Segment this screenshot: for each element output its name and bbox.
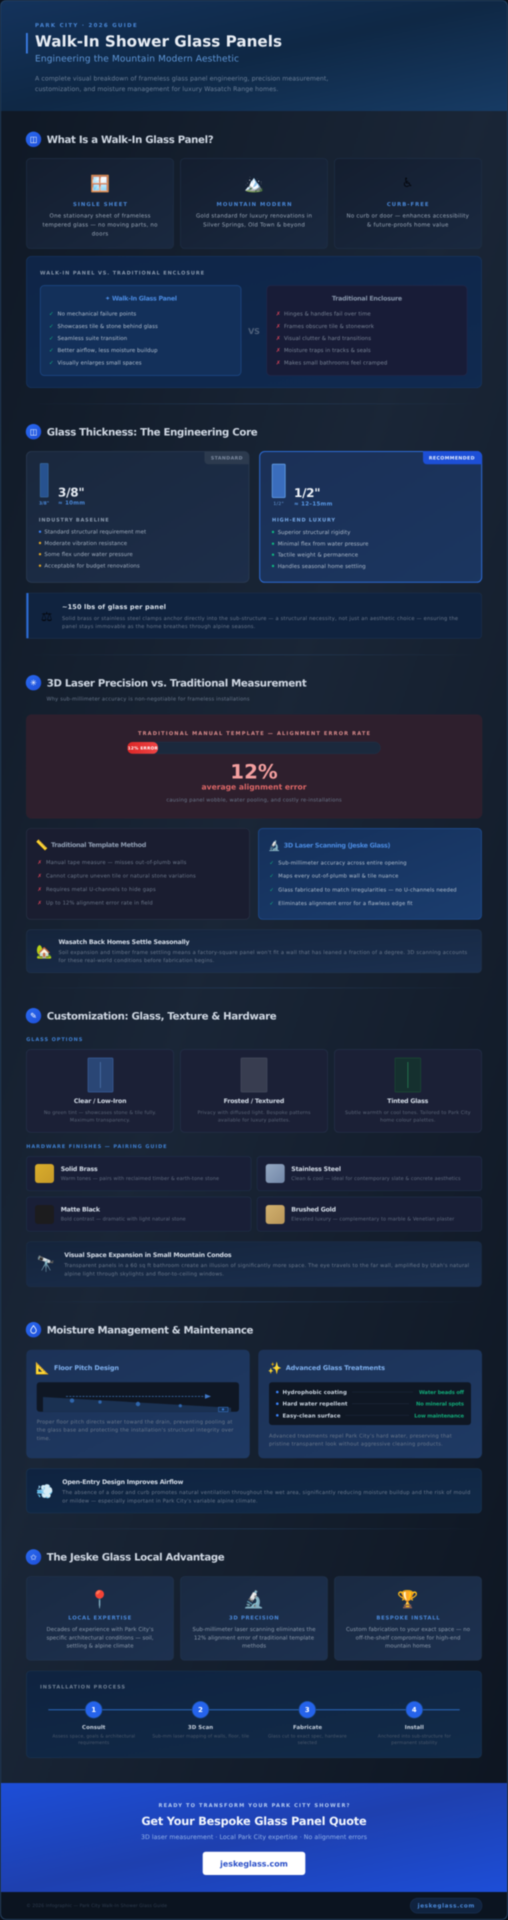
- icon: microscope: 🔬: [243, 1589, 265, 1610]
- table: treatments and benefits: Hydrophobic coating: [282, 1389, 347, 1396]
- section heading: local advantage: The Jeske Glass Local Advantage: [47, 1553, 225, 1564]
- section heading: customization: ✎: [30, 1012, 37, 1021]
- step 3: 3: [305, 1706, 310, 1714]
- hero header: Engineering the Mountain Modern Aesthetic: [35, 54, 239, 64]
- glass sample: [39, 464, 49, 507]
- step 1: Assess space, goals & architectural: [52, 1734, 135, 1740]
- card text: 3d precision: Sub-millimeter laser scanning eliminates the: [192, 1626, 316, 1633]
- panel: traditional template method: Cannot capture uneven tile or natural stone variations: [46, 873, 196, 879]
- finish: stainless steel: [266, 1164, 461, 1183]
- traditional column: ✗: [276, 335, 281, 342]
- panel: alignment error rate: causing panel wobble, water pooling, and costly re-installations: [166, 798, 342, 804]
- callout: visual space expansion: Transparent panels in a 60 sq ft bathroom create an illusion of significantly more space. The eye travels to the far wall, amplified by Utah's natural: [63, 1263, 469, 1269]
- panel: installation process: [26, 1671, 482, 1758]
- panel: 3d laser scanning: ✓: [270, 901, 274, 907]
- callout: seasonal settling: Soil expansion and timber frame settling means a factory-square panel won't fit a wall that has leaned a fraction of a degree. 3D scanning accounts: [58, 950, 468, 956]
- traditional column: ✗: [276, 310, 281, 318]
- card text: mountain modern: MOUNTAIN MODERN: [216, 202, 292, 208]
- card text: bespoke install: [346, 1616, 470, 1650]
- section heading: moisture management: [26, 1322, 254, 1337]
- finish: matte black: [35, 1205, 186, 1224]
- panel: floor pitch design: time.: [37, 1436, 51, 1442]
- list: baseline traits: Some flex under water pressure: [44, 551, 133, 558]
- walk-in column: Showcases tile & stone behind glass: [58, 323, 158, 330]
- walk-in column: ✓: [49, 360, 54, 366]
- panel: 1/2 inch recommended glass: 1/2": [294, 486, 320, 500]
- swatch: clear glass: [88, 1058, 113, 1092]
- hero header: A complete visual breakdown of frameless glass panel engineering, precision measurement,: [35, 76, 328, 82]
- card text: bespoke install: Custom fabrication to your exact space — no: [346, 1626, 470, 1633]
- card text: clear: No green tint — showcases stone & tile fully.: [44, 1110, 156, 1116]
- callout: visual space expansion: [26, 1242, 482, 1287]
- card text: local expertise: settling & alpine climate: [66, 1643, 134, 1650]
- card text: frosted: Privacy with diffused light. Bespoke patterns: [198, 1110, 311, 1116]
- step 2: 2: [198, 1706, 203, 1714]
- finish: solid brass: [35, 1164, 219, 1183]
- callout: seasonal settling: Wasatch Back Homes Settle Seasonally: [58, 939, 190, 946]
- card text: frosted: [198, 1098, 311, 1124]
- panel: 3d laser scanning: Sub-millimeter accuracy across entire opening: [278, 860, 407, 866]
- card text: clear: Maximum transparency.: [70, 1118, 130, 1124]
- glass sample: [272, 464, 285, 507]
- card text: curb-free: No curb or door — enhances accessibility: [347, 212, 470, 220]
- card text: mountain modern: Silver Springs, Old Town & beyond: [203, 222, 305, 228]
- panel: alignment error rate: 12%: [230, 760, 278, 783]
- section heading: glass thickness: [26, 424, 258, 439]
- panel: feature cards: [26, 158, 482, 248]
- hero header: Walk-In Shower Glass Panels: [35, 32, 282, 50]
- step 3: selected: [298, 1740, 317, 1746]
- card text: tinted: home colour palettes.: [380, 1118, 435, 1124]
- panel: traditional template method: ✗: [38, 887, 42, 893]
- step 4: [378, 1701, 451, 1746]
- footer link pill: [410, 1898, 482, 1913]
- table: treatments and benefits: Low maintenance: [414, 1413, 464, 1419]
- walk-in column: Visually enlarges small spaces: [58, 360, 142, 366]
- step 3: Fabricate: [293, 1724, 322, 1731]
- call to action: 3D laser measurement · Local Park City expertise · No alignment errors: [141, 1834, 367, 1841]
- callout: open-entry airflow: [26, 1469, 482, 1513]
- hero header: PARK CITY · 2026 GUIDE: [35, 23, 137, 29]
- glass sample: 1/2": [273, 501, 284, 507]
- panel: floor pitch design: the glass base and protecting the installation's structural integrity over: [37, 1428, 234, 1434]
- panel: traditional template method: Traditional Template Method: [51, 841, 147, 849]
- diagram: floor slope to drain: [37, 1382, 239, 1412]
- finish: matte black: Matte Black: [61, 1206, 101, 1214]
- panel: 3d laser scanning: Glass fabricated to match irregularities — no U-channels needed: [278, 887, 457, 893]
- finish: brushed gold: [266, 1205, 455, 1224]
- card text: local expertise: specific architectural conditions — soil,: [46, 1634, 154, 1641]
- step 3: Glass cut to exact spec, hardware: [268, 1734, 347, 1740]
- card text: local expertise: [46, 1616, 154, 1650]
- panel: 3/8 inch standard glass: INDUSTRY BASELINE: [39, 517, 109, 523]
- panel: 1/2 inch recommended glass: HIGH-END LUXURY: [272, 518, 335, 524]
- callout: open-entry airflow: The absence of a door and curb promotes natural ventilation throughout the wet area, significantly reducing moisture buildup and the risk of mould: [61, 1490, 470, 1496]
- traditional column: Hinges & handles fail over time: [284, 310, 371, 318]
- bar chart: 12 percent error: 12% ERROR: [128, 746, 158, 751]
- card text: bespoke install: mountain homes: [385, 1643, 431, 1650]
- section heading: local advantage: ✩: [30, 1553, 37, 1562]
- icon: ruler: 📏: [36, 838, 48, 852]
- step 1: Consult: [82, 1724, 106, 1731]
- panel: advanced glass treatments: Advanced Glass Treatments: [286, 1364, 385, 1372]
- panel: floor pitch design: Proper floor pitch directs water toward the drain, preventing pooling at: [37, 1420, 232, 1426]
- panel: 3/8 inch standard glass: ≈ 10mm: [58, 500, 85, 506]
- panel: 3d laser scanning: ✓: [270, 860, 274, 866]
- section heading: what is a walk-in glass panel: [26, 132, 214, 147]
- card text: mountain modern: Gold standard for luxury renovations in: [196, 212, 312, 220]
- walk-in column: ✓: [49, 348, 54, 354]
- table: treatments and benefits: [269, 1382, 471, 1425]
- panel: local advantage cards: [26, 1576, 482, 1660]
- panel: 1/2 inch recommended glass: ≈ 12–15mm: [294, 500, 333, 507]
- swatch: tinted glass: [395, 1058, 421, 1092]
- list: luxury traits: Minimal flex from water pressure: [278, 541, 369, 548]
- section heading: what is a walk-in glass panel: What Is a Walk-In Glass Panel?: [47, 135, 214, 146]
- panel: 3d laser scanning: Eliminates alignment error for a flawless edge fit: [278, 901, 413, 907]
- callout: glass weight: [26, 593, 482, 638]
- list: baseline traits: Acceptable for budget renovations: [44, 563, 140, 570]
- walk-in column: Seamless suite transition: [58, 335, 127, 342]
- panel: advanced glass treatments: pristine transparent look without aggressive cleaning products.: [269, 1442, 443, 1448]
- walk-in column: ✦ Walk-In Glass Panel: [105, 296, 177, 302]
- panel: alignment error rate: average alignment error: [202, 783, 307, 792]
- panel: advanced glass treatments: Advanced treatments repel Park City's hard water, preserving that: [269, 1433, 452, 1439]
- step 4: Install: [405, 1724, 424, 1731]
- panel: walk-in vs traditional comparison: [26, 256, 482, 388]
- step 1: 1: [91, 1706, 96, 1714]
- panel: installation process: INSTALLATION PROCESS: [40, 1685, 125, 1691]
- list: baseline traits: [39, 529, 146, 570]
- step 2: [152, 1701, 249, 1740]
- panel: traditional template method: Manual tape measure — misses out-of-plumb walls: [46, 860, 187, 866]
- traditional column: Moisture traps in tracks & seals: [284, 347, 371, 354]
- panel: alignment error rate: [26, 715, 482, 818]
- section heading: moisture management: Moisture Management & Maintenance: [47, 1325, 254, 1336]
- vs label: VS: [248, 327, 260, 336]
- icon: window: 🪟: [90, 174, 110, 193]
- icon: sparkles: ✨: [268, 1361, 282, 1375]
- finish: solid brass: Solid Brass: [61, 1166, 98, 1173]
- panel: alignment error rate: TRADITIONAL MANUAL TEMPLATE — ALIGNMENT ERROR RATE: [138, 731, 371, 737]
- card text: curb-free: & future-proofs home value: [367, 222, 449, 228]
- card text: 3d precision: methods: [242, 1643, 266, 1650]
- footer link pill: jeskeglass.com: [417, 1903, 474, 1910]
- table: treatments and benefits: Water beads off: [419, 1390, 465, 1396]
- finish: matte black: Bold contrast — dramatic with light natural stone: [61, 1217, 186, 1223]
- walk-in column: Better airflow, less moisture buildup: [58, 347, 158, 354]
- callout: seasonal settling: for these real-world conditions before fabrication begins.: [58, 958, 215, 964]
- traditional column: ✗: [276, 323, 281, 330]
- list: luxury traits: Tactile weight & permanence: [277, 552, 359, 559]
- card text: 3d precision: [192, 1616, 316, 1650]
- finish: stainless steel: Stainless Steel: [291, 1166, 341, 1173]
- panel: advanced glass treatments: [258, 1350, 482, 1458]
- card text: curb-free: CURB-FREE: [387, 202, 429, 208]
- icon: telescope: 🔭: [37, 1255, 55, 1273]
- panel: traditional template method: ✗: [38, 860, 42, 866]
- panel: traditional template method: [26, 828, 250, 919]
- walk-in column: [40, 286, 241, 376]
- icon: trophy: 🏆: [397, 1589, 419, 1610]
- walk-in column: No mechanical failure points: [58, 310, 136, 318]
- step 4: permanent stability: [391, 1740, 438, 1746]
- finish: stainless steel: Clean & cool — ideal for contemporary slate & concrete aesthetics: [291, 1176, 461, 1182]
- icon: mountain: 🏔️: [244, 174, 264, 193]
- card text: clear: Clear / Low-Iron: [74, 1098, 127, 1105]
- badge: standard: [204, 452, 249, 464]
- panel: traditional template method: Requires metal U-channels to hide gaps: [46, 887, 156, 893]
- hero header: customization, and moisture management for luxury Wasatch Range homes.: [35, 86, 278, 93]
- call to action: [0, 1783, 508, 1892]
- swatch: frosted glass: [241, 1058, 267, 1092]
- card text: 3d precision: 12% alignment error of traditional template: [194, 1634, 315, 1641]
- list: baseline traits: Standard structural requirement met: [44, 529, 146, 536]
- card text: local expertise: LOCAL EXPERTISE: [68, 1616, 132, 1622]
- walk-in column: ✓: [49, 312, 54, 318]
- callout: glass weight: panel stays immovable as the home breathes through alpine seasons.: [62, 624, 256, 630]
- section heading: 3d laser precision: ✳: [30, 679, 37, 688]
- traditional column: [267, 286, 467, 376]
- step 3: [268, 1701, 347, 1746]
- badge: standard: STANDARD: [211, 456, 243, 462]
- section heading: 3d laser precision: Why sub-millimeter accuracy is non-negotiable for frameless installations: [46, 696, 250, 702]
- card text: single sheet: One stationary sheet of frameless: [50, 212, 151, 220]
- panel: 1/2 inch recommended glass: [260, 451, 482, 582]
- button: jeskeglass.com: [219, 1859, 288, 1868]
- card text: single sheet: [42, 202, 158, 237]
- footer: © 2026 Infographic — Park City Walk-In Shower Glass Guide: [26, 1903, 167, 1909]
- panel: walk-in vs traditional comparison: WALK-IN PANEL VS. TRADITIONAL ENCLOSURE: [40, 271, 205, 277]
- step 1: requirements: [78, 1740, 110, 1746]
- panel: 3d laser scanning: Maps every out-of-plumb wall & tile nuance: [278, 874, 398, 880]
- list: luxury traits: Handles seasonal home settling: [278, 563, 366, 570]
- card text: frosted: available for luxury palettes.: [218, 1118, 290, 1124]
- step 2: Sub-mm laser mapping of walls, floor, tile: [152, 1734, 249, 1740]
- section heading: glass thickness: Glass Thickness: The Engineering Core: [47, 427, 258, 438]
- heading: glass options: GLASS OPTIONS: [26, 1037, 83, 1043]
- list: baseline traits: Moderate vibration resistance: [44, 540, 128, 547]
- card text: clear: [44, 1098, 156, 1124]
- section heading: 3d laser precision: 3D Laser Precision vs. Traditional Measurement: [47, 678, 307, 689]
- finish: brushed gold: Brushed Gold: [291, 1206, 336, 1214]
- footer: [0, 1892, 508, 1920]
- icon: house: 🏡: [36, 945, 52, 960]
- callout: seasonal settling: [26, 930, 482, 973]
- panel: floor pitch design: [26, 1350, 250, 1458]
- icon: microscope: 🔬: [268, 839, 281, 852]
- panel: 3d laser scanning: 3D Laser Scanning (Jeske Glass): [284, 841, 390, 849]
- walk-in column: ✓: [49, 324, 54, 330]
- icon: accessibility: ♿: [402, 176, 414, 191]
- traditional column: Makes small bathrooms feel cramped: [284, 360, 387, 366]
- button: [203, 1852, 305, 1875]
- badge: recommended: RECOMMENDED: [429, 456, 475, 462]
- card text: single sheet: SINGLE SHEET: [73, 202, 127, 208]
- step 4: Anchored into sub-structure for: [378, 1734, 451, 1740]
- glass sample: 3/8": [39, 501, 49, 507]
- icon: wind: 💨: [36, 1483, 54, 1500]
- panel: 3d laser scanning: ✓: [270, 874, 274, 880]
- card text: mountain modern: [196, 202, 312, 228]
- card text: single sheet: doors: [92, 230, 108, 237]
- card text: single sheet: tempered glass — no moving parts, no: [42, 222, 158, 228]
- card text: tinted: [345, 1098, 471, 1124]
- panel: 3/8 inch standard glass: [26, 452, 249, 582]
- callout: glass weight: ⚖: [41, 610, 53, 625]
- call to action: READY TO TRANSFORM YOUR PARK CITY SHOWER?: [158, 1803, 350, 1809]
- call to action: Get Your Bespoke Glass Panel Quote: [141, 1815, 367, 1828]
- card text: tinted: Tinted Glass: [387, 1098, 429, 1105]
- bar chart: 12 percent error: [127, 742, 380, 754]
- card text: frosted: Frosted / Textured: [224, 1098, 284, 1105]
- card text: curb-free: [347, 202, 470, 228]
- panel: hardware finishes: [26, 1156, 482, 1231]
- traditional column: Traditional Enclosure: [332, 296, 402, 302]
- callout: open-entry airflow: Open-Entry Design Improves Airflow: [62, 1479, 184, 1486]
- callout: open-entry airflow: or mildew — especially important in Park City's variable alpine climate.: [62, 1498, 258, 1504]
- callout: glass weight: ~150 lbs of glass per panel: [62, 603, 166, 611]
- callout: visual space expansion: Visual Space Expansion in Small Mountain Condos: [64, 1252, 232, 1259]
- hero header: [0, 0, 508, 111]
- section heading: 3d laser precision: [26, 675, 307, 702]
- table: treatments and benefits: Easy-clean surface: [282, 1412, 341, 1419]
- table: treatments and benefits: Hard water repellent: [282, 1401, 348, 1408]
- section heading: customization: Customization: Glass, Texture & Hardware: [47, 1011, 277, 1022]
- panel: traditional template method: ✗: [38, 900, 42, 906]
- icon: triangle ruler: 📐: [35, 1361, 50, 1375]
- step 2: 3D Scan: [188, 1725, 213, 1731]
- panel: 3/8 inch standard glass: 3/8": [58, 486, 85, 500]
- table: treatments and benefits: No mineral spots: [416, 1402, 464, 1408]
- card text: 3d precision: 3D PRECISION: [229, 1616, 279, 1622]
- traditional column: ✗: [276, 360, 281, 366]
- finish: brushed gold: Elevated luxury — complementary to marble & Venetian plaster: [291, 1217, 455, 1223]
- list: luxury traits: [272, 529, 369, 570]
- icon: location pin: 📍: [89, 1589, 111, 1610]
- section heading: what is a walk-in glass panel: ◫: [30, 135, 37, 144]
- card text: tinted: Subtle warmth or cool tones. Tailored to Park City: [345, 1110, 471, 1116]
- list: luxury traits: Superior structural rigidity: [278, 529, 351, 536]
- traditional column: Visual clutter & hard transitions: [284, 335, 371, 342]
- walk-in column: ✓: [49, 336, 54, 342]
- card text: bespoke install: BESPOKE INSTALL: [376, 1616, 440, 1622]
- section heading: customization: [26, 1008, 277, 1023]
- badge: recommended: [423, 451, 482, 464]
- panel: traditional template method: ✗: [38, 873, 42, 879]
- traditional column: ✗: [276, 347, 281, 354]
- panel: floor pitch design: Floor Pitch Design: [54, 1364, 119, 1372]
- heading: hardware finishes: HARDWARE FINISHES — PAIRING GUIDE: [26, 1144, 167, 1150]
- panel: traditional template method: Up to 12% alignment error rate in field: [46, 900, 153, 906]
- section heading: glass thickness: ◫: [30, 428, 37, 437]
- step 4: 4: [412, 1706, 417, 1714]
- callout: visual space expansion: alpine light through skylights and floor-to-ceiling windows.: [64, 1271, 224, 1277]
- card text: bespoke install: off-the-shelf compromise for high-end: [356, 1634, 460, 1641]
- panel: 3d laser scanning: [258, 828, 482, 919]
- card text: local expertise: Decades of experience with Park City's: [46, 1626, 154, 1633]
- finish: solid brass: Warm tones — pairs with reclaimed timber & earth-tone stone: [61, 1176, 219, 1182]
- callout: glass weight: Solid brass or stainless steel clamps anchor directly into the sub-structure — a structural necessity, not just an aesthetic choice — ensuring the: [62, 616, 458, 622]
- section heading: local advantage: [26, 1549, 225, 1565]
- step 1: [52, 1701, 135, 1746]
- panel: glass option cards: [26, 1050, 482, 1132]
- panel: 3d laser scanning: ✓: [270, 887, 274, 893]
- traditional column: Frames obscure tile & stonework: [284, 323, 375, 330]
